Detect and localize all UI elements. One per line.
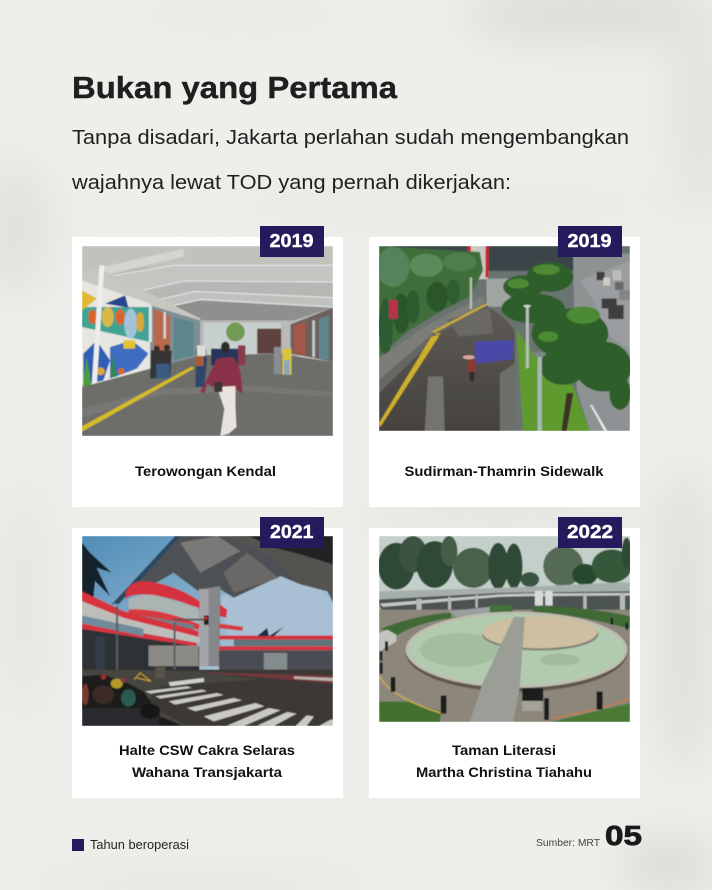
subtitle text block: wajahnya lewat TOD yang pernah dikerjakan: — [71, 171, 511, 194]
title: Bukan yang Pertama — [72, 71, 398, 105]
photo: rainy sidewalk — [379, 246, 630, 431]
photo: CSW station at dusk — [82, 536, 333, 726]
source note: Sumber: MRT — [536, 837, 601, 849]
page number: 05 — [605, 820, 642, 851]
label: Martha Christina Tiahahu — [416, 764, 592, 780]
year badge: 2021 — [270, 522, 314, 542]
year badge: 2022 — [567, 522, 613, 542]
year badge — [558, 517, 622, 548]
year badge: 2019 — [270, 231, 314, 251]
photo: circular pond park — [379, 536, 630, 722]
year badge: 2019 — [568, 231, 612, 251]
label: Terowongan Kendal — [135, 463, 276, 479]
label: Sudirman-Thamrin Sidewalk — [404, 463, 604, 479]
other pedestrians — [150, 345, 292, 387]
subtitle text block: Tanpa disadari, Jakarta perlahan sudah mengembangkan — [72, 126, 629, 149]
panel: Terowongan Kendal — [72, 226, 343, 507]
label — [119, 742, 295, 780]
panel: Taman Literasi — [369, 517, 640, 798]
label: Halte CSW Cakra Selaras — [119, 742, 295, 758]
year badge — [558, 226, 622, 257]
legend: tahun beroperasi: Tahun beroperasi — [90, 838, 189, 852]
label: Wahana Transjakarta — [132, 764, 282, 780]
panel: Halte CSW — [72, 517, 343, 798]
walking man — [200, 342, 243, 436]
label — [416, 742, 592, 780]
label: Taman Literasi — [452, 742, 556, 758]
panel: Sudirman-Thamrin Sidewalk — [369, 226, 640, 507]
year badge — [260, 226, 324, 257]
subtitle text block — [71, 126, 629, 194]
year badge — [260, 517, 324, 548]
photo: tunnel with mural and pedestrians — [82, 246, 333, 436]
